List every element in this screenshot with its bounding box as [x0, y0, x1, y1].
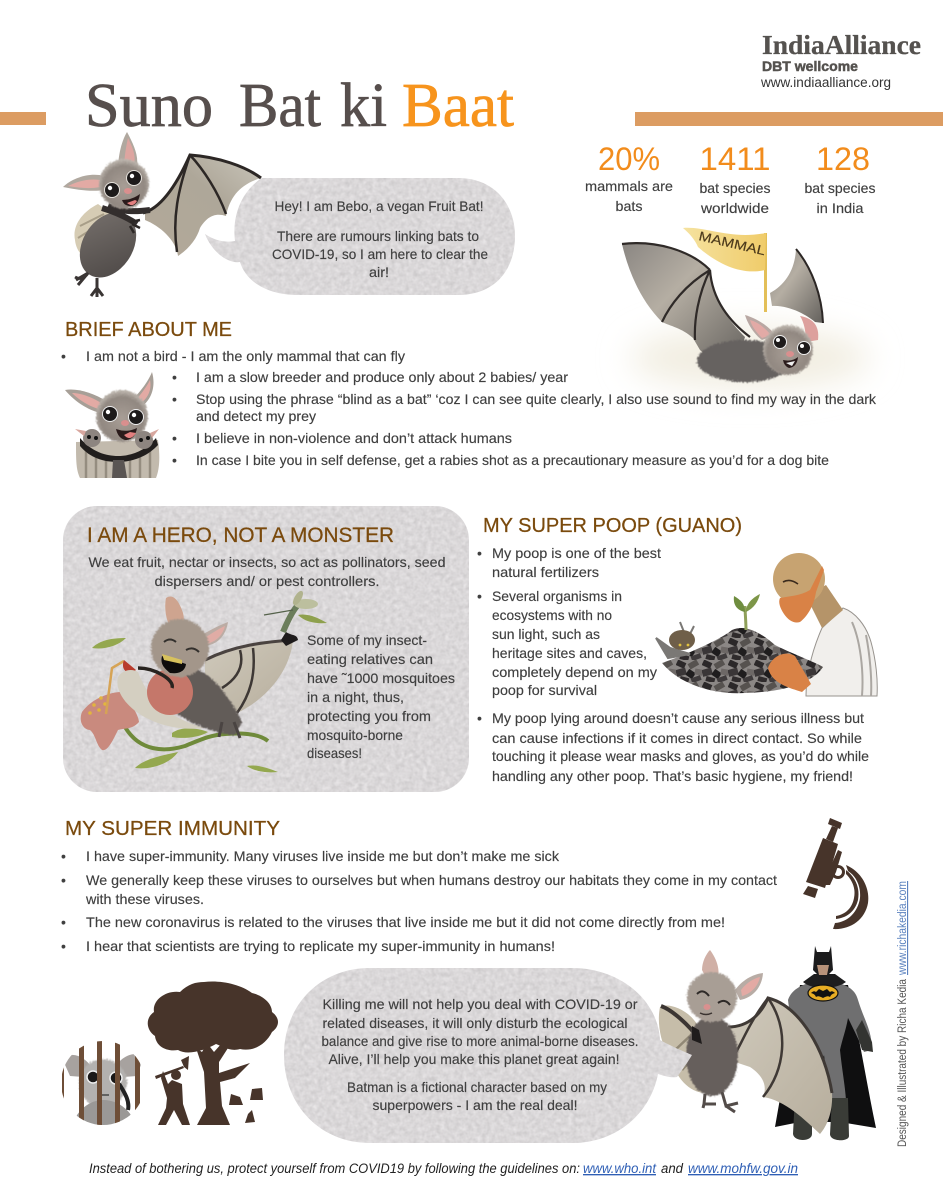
heading: brief about me: BRIEF ABOUT ME: [65, 318, 232, 341]
logo: India Alliance: [760, 30, 921, 90]
stat: 128 species: bat species: [804, 180, 876, 196]
bullet list: immunity: We generally keep these viruses to ourselves but when humans destroy our habitats they come in my contact: [86, 872, 777, 888]
illustration: mammal bat with flag: MAMMAL: [697, 228, 767, 258]
header bar left: [0, 112, 46, 125]
panel mosquito text: protecting you from: [307, 708, 431, 724]
footer: guidelines: www.mohfw.gov.in: [688, 1161, 798, 1176]
bullet list: brief about me: •: [172, 391, 177, 407]
footer: guidelines: Instead of bothering us, protect yourself from COVID19 by following the guidelines on:: [89, 1161, 580, 1176]
bullet list: immunity: •: [61, 872, 66, 888]
stat: 1411 species: 1411: [700, 141, 770, 177]
bullet list: immunity: I have super-immunity. Many viruses live inside me but don’t make me sick: [86, 848, 560, 864]
title: Baat: [402, 72, 514, 140]
bubble text: superpowers - I am the real deal!: [372, 1097, 578, 1113]
stat: 20% mammals: bats: [616, 198, 642, 214]
bullet list: guano: heritage sites and caves,: [492, 645, 647, 661]
bullet list: guano: natural fertilizers: [492, 564, 599, 580]
logo: India Alliance: IndiaAlliance: [762, 30, 921, 60]
panel intro text: [88, 554, 446, 589]
bullet list: guano: Several organisms in: [492, 588, 622, 604]
bubble text: air!: [369, 264, 389, 280]
panel mosquito text: diseases!: [307, 745, 362, 761]
bullet list: guano: poop for survival: [492, 682, 597, 698]
bullet list: brief about me: Stop using the phrase “blind as a bat” ‘coz I can see quite clearly, I also use sound to find my way in the dark: [196, 391, 877, 407]
title: [85, 72, 514, 140]
bullet list: brief about me: •: [172, 452, 177, 468]
bullet list: brief about me: and detect my prey: [196, 408, 316, 424]
bullet list: guano: can cause infections if it comes in direct contact. So while: [492, 730, 862, 746]
footer: guidelines: www.who.int: [583, 1161, 657, 1176]
header bar right: [635, 112, 943, 126]
icon: microscope: [803, 818, 868, 929]
bullet list: immunity: •: [61, 848, 66, 864]
bullet list: brief about me: •: [61, 348, 66, 364]
credit: designer, vertical: www.richakedia.com: [897, 881, 909, 976]
illustration: Bebo flying bat: [63, 132, 261, 297]
footer: guidelines: and: [661, 1161, 683, 1176]
bubble text: There are rumours linking bats to: [277, 228, 479, 244]
bubble text: COVID-19, so I am here to clear the: [272, 246, 488, 262]
stat: 1411 species: bat species: [700, 180, 770, 196]
panel mosquito text: Some of my insect-: [307, 632, 427, 648]
bullet list: guano: touching it please wear masks and gloves, as you’d do while: [492, 748, 869, 764]
bullet list: guano: My poop is one of the best: [492, 545, 661, 561]
stat: 20% mammals: [585, 141, 673, 214]
bullet list: guano: My poop lying around doesn’t cause any serious illness but: [492, 710, 864, 726]
heading: my super poop: MY SUPER POOP (GUANO): [483, 514, 742, 537]
bullet list: immunity: with these viruses.: [85, 891, 204, 907]
illustration: mammal bat with flag: [622, 228, 870, 390]
bullet list: immunity: The new coronavirus is related to the viruses that live inside me but it did not come directly from me!: [86, 914, 725, 930]
bubble text: Batman is a fictional character based on my: [347, 1079, 607, 1095]
bullet list: brief about me: In case I bite you in self defense, get a rabies shot as a precautionary measure as you’d for a dog bite: [196, 452, 829, 468]
bubble text: [272, 198, 488, 280]
bullet list: immunity: •: [61, 938, 66, 954]
speech bubble: closing message: [284, 968, 692, 1143]
stat: 128 species: 128: [816, 141, 870, 177]
panel intro text: dispersers and/ or pest controllers.: [154, 573, 380, 589]
illustration: bat with Batman: [659, 950, 832, 1134]
stat: 20% mammals: mammals are: [585, 178, 673, 194]
bullet list: guano: sun light, such as: [492, 626, 600, 642]
panel mosquito text: in a night, thus,: [307, 689, 404, 705]
bullet list: brief about me: I am not a bird - I am the only mammal that can fly: [86, 348, 405, 364]
credit: designer, vertical: Designed & Illustrated by Richa Kedia: [897, 978, 909, 1147]
bullet list: guano: •: [477, 588, 482, 604]
bullet list: brief about me: [61, 348, 877, 468]
bullet list: brief about me: I believe in non-violence and don’t attack humans: [196, 430, 512, 446]
speech bubble: intro: [205, 178, 515, 295]
bullet list: immunity: I hear that scientists are trying to replicate my super-immunity in humans!: [86, 938, 555, 954]
stat: 1411 species: worldwide: [700, 200, 769, 216]
bullet list: guano: ecosystems with no: [492, 607, 612, 623]
stat: 1411 species: [700, 141, 770, 216]
illustration: masked person with guano pile: [656, 553, 877, 696]
panel intro text: We eat fruit, nectar or insects, so act as pollinators, seed: [88, 554, 446, 570]
bubble text: Killing me will not help you deal with COVID-19 or: [322, 996, 638, 1012]
bullet list: immunity: [61, 848, 777, 954]
bullet list: immunity: •: [61, 914, 66, 930]
bubble text: related diseases, it will only disturb the ecological: [322, 1015, 628, 1031]
bullet list: guano: [477, 545, 869, 784]
stat: 128 species: in India: [816, 200, 864, 216]
panel heading: I AM A HERO, NOT A MONSTER: [87, 524, 394, 547]
bullet list: brief about me: •: [172, 369, 177, 385]
title: Suno: [85, 72, 213, 140]
stat: 128 species: [804, 141, 876, 216]
title: ki: [340, 72, 387, 140]
stat: 20% mammals: 20%: [598, 141, 660, 177]
illustration: caged bat: [62, 1038, 144, 1127]
heading: my super immunity: MY SUPER IMMUNITY: [65, 817, 280, 840]
panel mosquito text: have ˜1000 mosquitoes: [307, 670, 455, 686]
panel mosquito text: [307, 632, 455, 761]
bullet list: brief about me: I am a slow breeder and produce only about 2 babies/ year: [196, 369, 568, 385]
bubble text: Hey! I am Bebo, a vegan Fruit Bat!: [274, 198, 484, 214]
bubble text: Alive, I’ll help you make this planet great again!: [328, 1051, 620, 1067]
bullet list: guano: •: [477, 545, 482, 561]
bullet list: guano: handling any other poop. That’s basic hygiene, my friend!: [492, 768, 853, 784]
panel: hero not a monster: [63, 506, 469, 792]
bubble text: balance and give rise to more animal-borne diseases.: [322, 1033, 638, 1049]
bullet list: guano: completely depend on my: [492, 664, 657, 680]
illustration: bat drinking nectar: [81, 589, 327, 772]
bullet list: guano: •: [477, 710, 482, 726]
title: Bat: [239, 72, 321, 140]
panel mosquito text: mosquito-borne: [307, 727, 403, 743]
logo: India Alliance: DBT wellcome: [762, 58, 858, 74]
logo: India Alliance: www.indiaalliance.org: [760, 75, 891, 90]
illustration: Bebo with babies: [65, 372, 159, 478]
bubble text: [322, 996, 638, 1113]
illustration: Batman: [775, 946, 876, 1140]
illustration: man chopping tree: [148, 981, 278, 1125]
bullet list: brief about me: •: [172, 430, 177, 446]
panel mosquito text: eating relatives can: [307, 651, 433, 667]
